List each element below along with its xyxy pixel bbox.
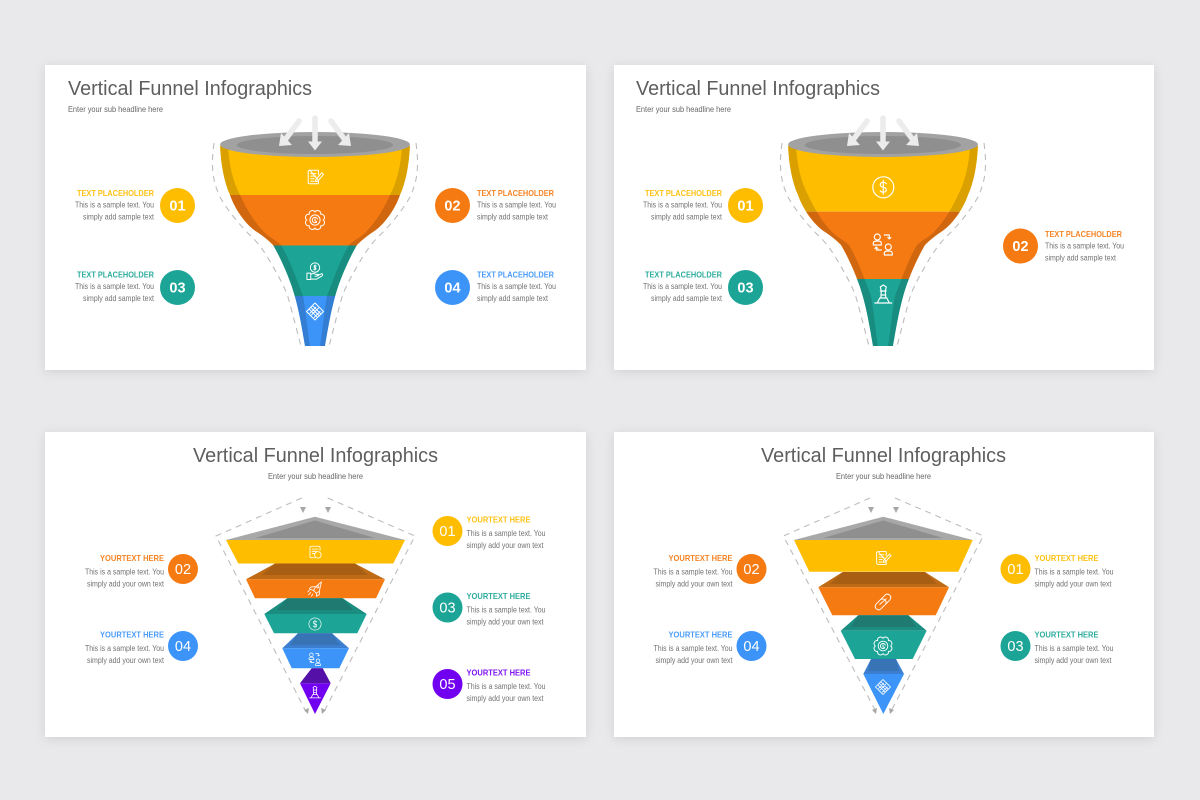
panel: five-layer stacked funnel xyxy=(45,432,586,737)
dashed funnel outline xyxy=(212,143,418,346)
callout 02: simply add your own text xyxy=(87,580,165,588)
callout 03: This is a sample text. You xyxy=(466,606,546,614)
icon: dollar xyxy=(309,618,321,630)
title: Vertical Funnel Infographics xyxy=(761,444,1006,467)
callout 01: This is a sample text. You xyxy=(75,200,154,210)
callout 02: YOURTEXT HERE xyxy=(668,553,733,563)
dashed funnel outline xyxy=(783,498,983,714)
callout 05 xyxy=(432,668,546,703)
callout 04: 04 xyxy=(444,280,461,296)
callout 01 xyxy=(75,188,195,223)
title: Vertical Funnel Infographics xyxy=(193,444,438,467)
callout 03: simply add your own text xyxy=(466,618,544,626)
layer: teal xyxy=(841,615,927,659)
callout 01: 01 xyxy=(439,524,456,540)
callout 04: This is a sample text. You xyxy=(654,644,732,653)
icon: rocket xyxy=(308,582,321,596)
callout 02: This is a sample text. You xyxy=(85,568,164,576)
icon: people swap xyxy=(309,653,320,666)
subtitle: Enter your sub headline here xyxy=(268,472,363,481)
callout 04 xyxy=(654,630,766,665)
callout 03: 03 xyxy=(169,280,186,296)
callout 03: This is a sample text. You xyxy=(643,282,722,291)
funnel graphic xyxy=(780,118,986,346)
callout 04: YOURTEXT HERE xyxy=(668,630,733,640)
callout 02: This is a sample text. You xyxy=(1045,242,1124,250)
panel: three-step curved funnel xyxy=(614,65,1154,370)
icon: gear xyxy=(874,637,892,655)
icon: chess tower xyxy=(875,285,892,303)
callout 04: 04 xyxy=(175,639,191,655)
subtitle: Enter your sub headline here xyxy=(68,105,163,114)
callout 04: simply add your own text xyxy=(87,656,165,665)
callout 03: simply add your own text xyxy=(1034,656,1112,665)
callout 01: 01 xyxy=(1007,562,1024,578)
layer: blue xyxy=(282,633,349,668)
dashed funnel outline xyxy=(216,498,415,714)
callout 01: simply add sample text xyxy=(83,212,155,222)
callout 02 xyxy=(654,553,766,588)
layer: grey top xyxy=(226,517,405,540)
callout 02: 02 xyxy=(1012,239,1029,255)
icon: gear xyxy=(306,211,324,229)
callout 04: simply add your own text xyxy=(656,656,733,665)
subtitle: Enter your sub headline here xyxy=(836,472,931,481)
callout 04: 04 xyxy=(743,639,760,655)
callout 02: TEXT PLACEHOLDER xyxy=(1045,229,1122,239)
icon: handshake xyxy=(876,680,890,694)
callout 01: YOURTEXT HERE xyxy=(1034,553,1099,563)
callout 05: 05 xyxy=(439,677,456,693)
funnel rim xyxy=(220,132,410,157)
callout 03 xyxy=(643,270,763,305)
callout 01: simply add your own text xyxy=(466,541,544,550)
callout 01: This is a sample text. You xyxy=(1034,568,1114,576)
callout 02: This is a sample text. You xyxy=(654,568,732,576)
callout 02 xyxy=(85,553,198,588)
title: Vertical Funnel Infographics xyxy=(68,77,312,100)
callout 05: This is a sample text. You xyxy=(466,682,546,691)
callout 04: simply add sample text xyxy=(477,294,549,303)
callout 01: 01 xyxy=(169,198,186,214)
callout 03: TEXT PLACEHOLDER xyxy=(645,270,722,280)
callout 03: simply add sample text xyxy=(83,294,155,303)
callout 01 xyxy=(432,514,546,550)
layer: grey top xyxy=(794,517,973,540)
callout 01: TEXT PLACEHOLDER xyxy=(645,188,722,198)
callout 03: TEXT PLACEHOLDER xyxy=(77,270,154,280)
callout 02: simply add your own text xyxy=(656,580,733,588)
layer: blue xyxy=(863,659,904,714)
icon: hand with coin xyxy=(307,263,323,280)
callout 03: YOURTEXT HERE xyxy=(466,591,531,601)
icon: people swap xyxy=(873,234,892,255)
layer: yellow xyxy=(794,540,973,572)
panel: four-layer stacked funnel xyxy=(614,432,1154,737)
callout 05: YOURTEXT HERE xyxy=(466,668,531,678)
callout 03 xyxy=(1000,630,1114,665)
callout 03: simply add sample text xyxy=(651,294,723,303)
layer: orange xyxy=(246,564,385,598)
callout 03 xyxy=(432,591,546,626)
icon: chain link xyxy=(875,594,891,610)
callout 03: 03 xyxy=(1007,639,1024,655)
callout 02 xyxy=(435,188,556,223)
layer: yellow xyxy=(226,540,405,564)
callout 01: This is a sample text. You xyxy=(466,529,546,538)
callout 01: This is a sample text. You xyxy=(643,200,722,210)
callout 01: YOURTEXT HERE xyxy=(466,514,531,524)
callout 03: 03 xyxy=(439,600,456,616)
layer: teal xyxy=(264,598,367,633)
panel: four-step curved funnel xyxy=(45,65,586,370)
callout 04 xyxy=(435,270,556,305)
icon: document xyxy=(310,546,321,558)
funnel body xyxy=(215,140,415,346)
callout 02: YOURTEXT HERE xyxy=(100,553,164,563)
icon: dollar xyxy=(873,177,894,198)
callout 02: simply add sample text xyxy=(1045,254,1117,262)
callout 03: 03 xyxy=(737,280,754,296)
callout 01: simply add sample text xyxy=(651,212,723,222)
callout 04 xyxy=(85,630,198,665)
icon: handshake xyxy=(306,303,324,320)
callout 01: TEXT PLACEHOLDER xyxy=(77,188,154,198)
inflow arrows xyxy=(279,118,351,150)
icon: note xyxy=(877,552,891,564)
callout 04: TEXT PLACEHOLDER xyxy=(477,270,554,280)
callout 01 xyxy=(1000,553,1114,588)
callout 02: simply add sample text xyxy=(477,212,549,222)
callout 02: 02 xyxy=(743,562,760,578)
subtitle: Enter your sub headline here xyxy=(636,105,731,114)
layer: orange xyxy=(818,572,949,615)
callout 02 xyxy=(1003,228,1124,264)
icon: tower xyxy=(309,686,321,698)
callout 02: TEXT PLACEHOLDER xyxy=(477,188,554,198)
callout 02: This is a sample text. You xyxy=(477,200,556,210)
icon: note xyxy=(308,170,324,184)
callout 05: simply add your own text xyxy=(466,694,544,703)
callout 02: 02 xyxy=(175,562,191,578)
callout 02: 02 xyxy=(444,198,461,214)
title: Vertical Funnel Infographics xyxy=(636,77,880,100)
callout 03 xyxy=(75,270,195,305)
callout 03: YOURTEXT HERE xyxy=(1034,630,1099,640)
callout 01: 01 xyxy=(737,198,754,214)
callout 04: This is a sample text. You xyxy=(85,644,164,653)
callout 01 xyxy=(643,188,763,223)
callout 03: This is a sample text. You xyxy=(1034,644,1114,653)
callout 01: simply add your own text xyxy=(1034,580,1112,588)
callout 04: YOURTEXT HERE xyxy=(100,630,164,640)
callout 04: This is a sample text. You xyxy=(477,282,556,291)
callout 03: This is a sample text. You xyxy=(75,282,154,291)
layer: purple xyxy=(300,668,331,714)
